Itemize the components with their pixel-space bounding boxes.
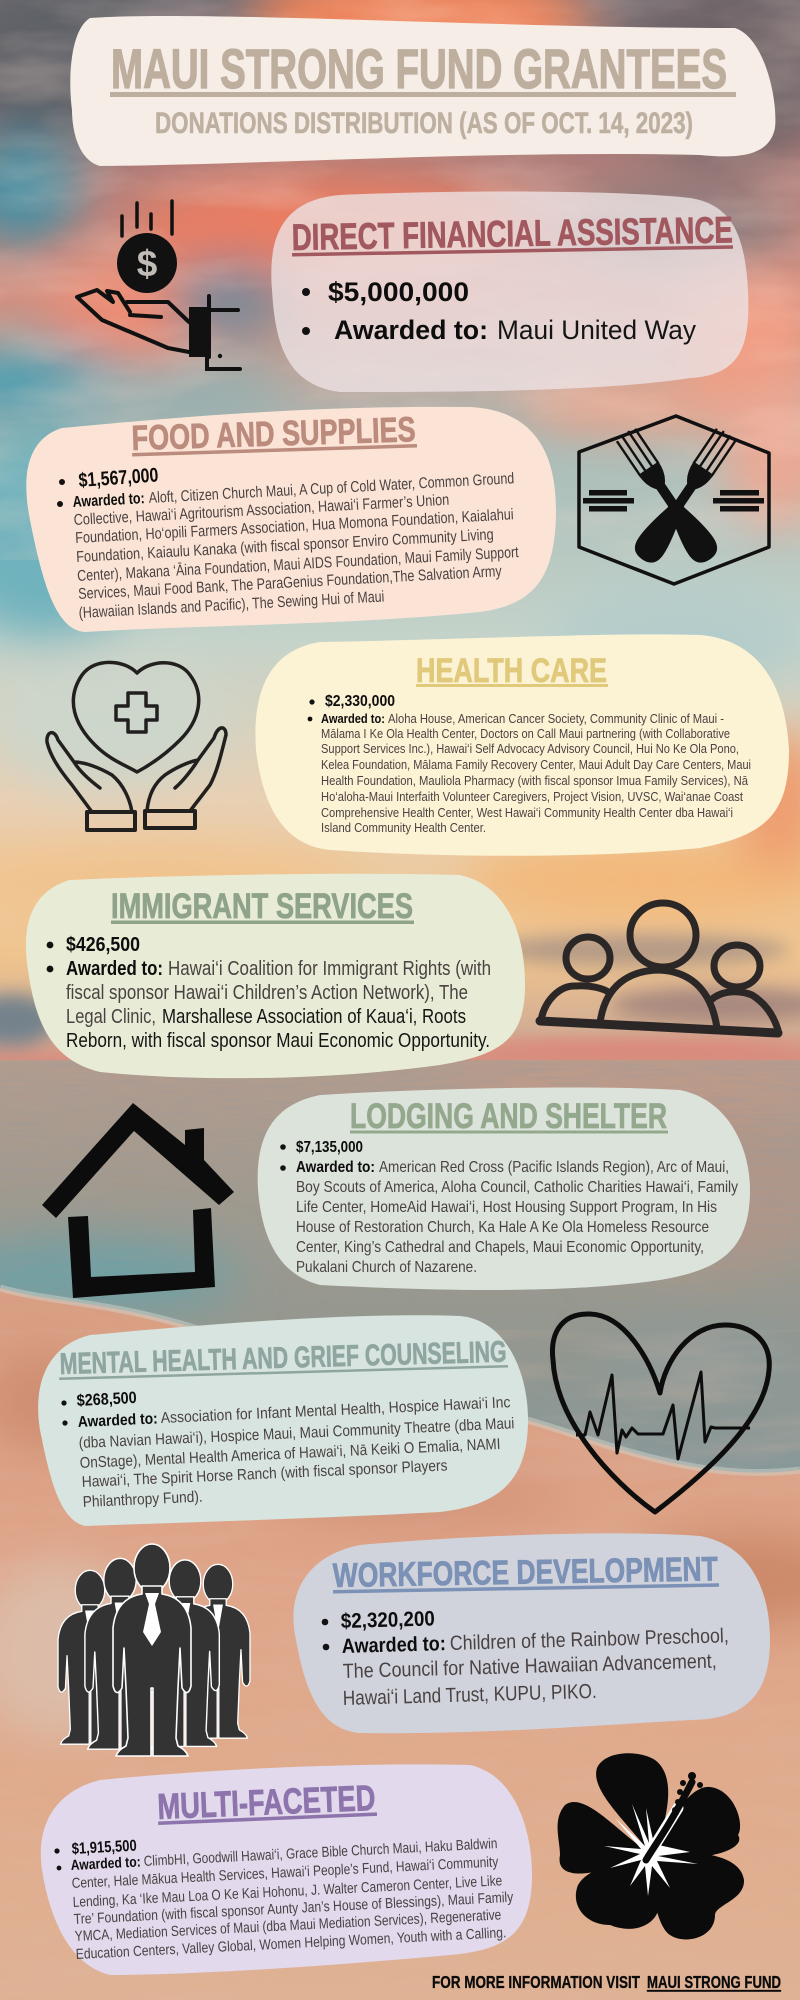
text: amount and recipients: Pukalani Church of Nazarene. — [296, 1259, 477, 1276]
text: amount and recipients: Children of the Rainbow Preschool, — [449, 1624, 729, 1655]
panel: workforce development — [293, 1533, 770, 1733]
text: amount and recipients — [322, 1607, 729, 1710]
text: amount and recipients: Awarded to: — [321, 711, 385, 726]
text: amount and recipients: Awarded to: — [296, 1159, 375, 1176]
icon: hibiscus flower — [558, 1753, 744, 1939]
panel: title — [70, 16, 775, 166]
text: amount and recipient: $5,000,000 — [328, 277, 469, 307]
text: amount and recipients: Education Centers, Valley Global, Women Helping Women, Youth with a Calling. — [75, 1925, 507, 1963]
text: amount and recipients: Comprehensive Health Center, West Hawai‘i Community Health Center dba Hawai‘i — [321, 805, 733, 820]
heading: mental health and grief counseling — [58, 1336, 508, 1381]
text: amount and recipients: Reborn, with fiscal sponsor Maui Economic Opportunity. — [66, 1030, 490, 1052]
panel: multi-faceted — [41, 1764, 532, 1975]
text: amount and recipients: Hawai‘i Land Trust, KUPU, PIKO. — [342, 1680, 597, 1710]
heading: multi-faceted: MULTI-FACETED — [157, 1777, 376, 1827]
text: amount and recipients: Center, King’s Cathedral and Chapels, Maui Economic Opportunity, — [296, 1239, 704, 1256]
text: amount and recipients: $1,567,000 — [78, 464, 159, 492]
text: amount and recipients — [57, 464, 520, 622]
text: amount and recipients — [47, 934, 491, 1052]
text: amount and recipients: YMCA, Mediation Services of Maui (dba Maui Mediation Services), Regenerative — [74, 1907, 502, 1945]
text: amount and recipients: $1,915,500 — [71, 1838, 137, 1858]
icon: group of business people — [58, 1544, 250, 1756]
text: amount and recipients: Mālama I Ke Ola Health Center, Doctors on Call Maui partnering (with Collaborative — [321, 726, 730, 741]
text: amount and recipients: Services, Maui Food Bank, The ParaGenius Foundation,The Salvation Army — [78, 563, 502, 603]
text: amount and recipients — [54, 1836, 514, 1963]
text: amount and recipients: (dba Navian Hawai‘i), Hospice Maui, Maui Community Theatre (dba Maui — [78, 1415, 515, 1452]
text: amount and recipients: Aloft, Citizen Church Maui, A Cup of Cold Water, Common Ground — [148, 470, 515, 507]
heading: health care: HEALTH CARE — [416, 652, 607, 690]
text: amount and recipients: Island Community Health Center. — [321, 820, 486, 835]
heading: food and supplies: FOOD AND SUPPLIES — [131, 410, 416, 458]
text: amount and recipients — [280, 1139, 738, 1276]
icon: hand receiving coin: $ — [137, 243, 158, 284]
text: amount and recipients: Hawai‘i Coalition for Immigrant Rights (with — [168, 958, 491, 980]
heading: mental health and grief counseling: MENTAL HEALTH AND GRIEF COUNSELING — [59, 1336, 507, 1381]
panel: mental health and grief counseling — [38, 1315, 528, 1526]
text: amount and recipients: Aloha House, American Cancer Society, Community Clinic of Maui - — [388, 711, 724, 726]
text: amount and recipients: Marshallese Association of Kaua‘i, Roots — [162, 1006, 466, 1028]
panel: immigrant services — [26, 874, 525, 1078]
text: amount and recipients: House of Restoration Church, Ka Hale A Ke Ola Homeless Resource — [296, 1219, 709, 1236]
icon: house — [42, 1103, 234, 1298]
icon: hand receiving coin — [77, 201, 240, 369]
text: amount and recipients: Foundation, Ho‘opili Farmers Association, Hua Momona Foundation, Kaialahui — [75, 506, 514, 547]
text: amount and recipients: Center), Makana ‘Āina Foundation, Maui AIDS Foundation, Maui Family Support — [77, 543, 520, 585]
icon: heart with pulse line — [552, 1314, 769, 1512]
panel: health care — [255, 634, 789, 856]
panel: food and supplies — [26, 407, 556, 632]
text: amount and recipients: Legal Clinic, — [66, 1006, 156, 1028]
text: amount and recipients: Awarded to: — [341, 1632, 446, 1658]
text: amount and recipients: Life Center, HomeAid Hawai‘i, Host Housing Support Program, In His — [296, 1199, 717, 1216]
text: amount and recipients: Lending, Ka ‘Ike Mau Loa O Ke Kai Hohonu, J. Walter Cameron Center, Live Like — [72, 1873, 503, 1911]
text: amount and recipients: Philanthropy Fund). — [82, 1489, 203, 1511]
icon: crossed forks in hexagon — [579, 416, 769, 584]
text: amount and recipients: $268,500 — [76, 1389, 137, 1410]
heading: immigrant services: IMMIGRANT SERVICES — [111, 887, 413, 926]
text: amount and recipients: $2,320,200 — [340, 1607, 435, 1633]
text: amount and recipient: Awarded to: — [334, 315, 488, 345]
text: amount and recipients: fiscal sponsor Hawai‘i Children’s Action Network), The — [66, 982, 468, 1004]
text: amount and recipients — [61, 1389, 515, 1511]
text: amount and recipients: OnStage), Mental Health America of Hawai‘i, Nā Keiki O Emalia, NAMI — [79, 1436, 501, 1472]
text: amount and recipients: Boy Scouts of America, Aloha Council, Catholic Charities Hawai‘i, Family — [296, 1179, 738, 1196]
text: amount and recipients: Awarded to: — [72, 490, 145, 511]
text: amount and recipients: Hawai‘i, The Spirit Horse Ranch (with fiscal sponsor Players — [81, 1457, 448, 1491]
panel: direct financial assistance — [271, 192, 748, 392]
text: amount and recipients: The Council for Native Hawaiian Advancement, — [342, 1650, 717, 1683]
text: amount and recipients: Center, Hale Mākua Health Services, Hawai‘i People’s Fund, Hawai‘i Community — [71, 1854, 499, 1892]
panel: lodging and shelter — [258, 1088, 750, 1290]
text: amount and recipient — [302, 277, 696, 345]
text: amount and recipients: (Hawaiian Islands and Pacific), The Sewing Hui of Maui — [78, 588, 385, 622]
text: amount and recipients: Collective, Hawai‘i Agritourism Association, Hawai‘i Farmer’s Union — [73, 492, 450, 529]
text: amount and recipients — [308, 693, 751, 835]
text: amount and recipients: Foundation, Kaiaulu Kanaka (with fiscal sponsor Enviro Community Living — [76, 526, 494, 566]
text: amount and recipients: Tre’ Foundation (with fiscal sponsor Aunty Jan’s House of Blessings), Maui Family — [73, 1890, 514, 1928]
text: amount and recipients: $2,330,000 — [325, 693, 395, 710]
text: amount and recipients: $7,135,000 — [296, 1139, 363, 1156]
icon: group of people — [540, 903, 778, 1033]
text: amount and recipients: Association for Infant Mental Health, Hospice Hawai‘i Inc — [160, 1394, 511, 1427]
text: amount and recipients: Awarded to: — [66, 958, 163, 980]
text: amount and recipient: Maui United Way — [497, 315, 696, 345]
icon: heart with cross in hands — [47, 662, 226, 830]
footer: more information link: FOR MORE INFORMATION VISIT — [432, 1972, 640, 1992]
heading: lodging and shelter: LODGING AND SHELTER — [350, 1097, 667, 1136]
text: amount and recipients: American Red Cross (Pacific Islands Region), Arc of Maui, — [379, 1159, 729, 1176]
text: amount and recipients: Awarded to: — [70, 1854, 141, 1874]
text: amount and recipients: Awarded to: — [77, 1410, 158, 1431]
text: amount and recipients: ClimbHI, Goodwill Hawai‘i, Grace Bible Church Maui, Haku Baldwin — [143, 1836, 498, 1870]
text: amount and recipients: $426,500 — [66, 934, 140, 956]
